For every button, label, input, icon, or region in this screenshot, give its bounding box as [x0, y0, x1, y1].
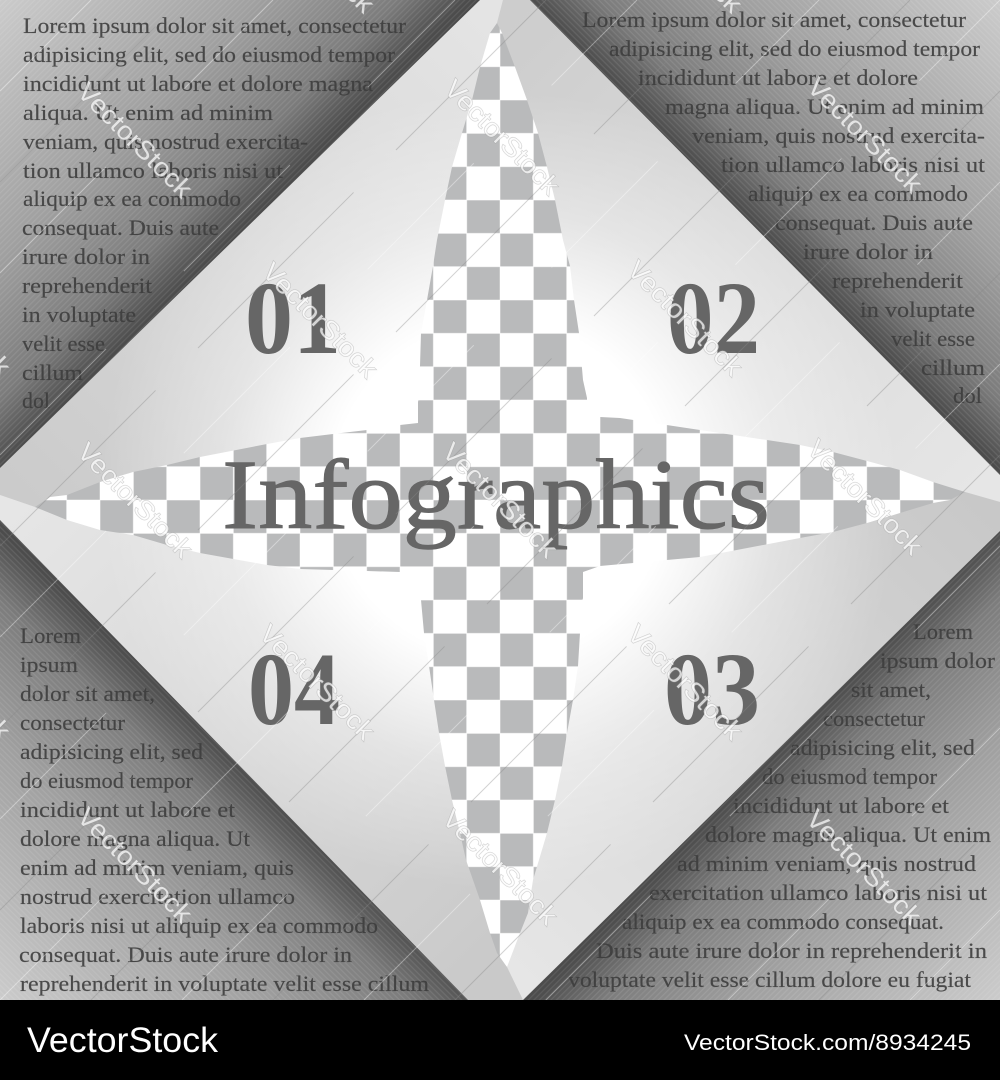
watermarks: VectorStock	[256, 256, 384, 384]
text block: bottom right: dolore magna aliqua. Ut enim	[705, 822, 991, 847]
text block: bottom right: aliquip ex ea commodo consequat.	[622, 909, 944, 934]
watermarks: VectorStock	[71, 436, 199, 564]
text block: top right: consequat. Duis aute	[775, 210, 973, 235]
text block: top left: aliquip ex ea commodo	[23, 186, 241, 211]
watermarks: VectorStock	[621, 254, 749, 382]
text block: top right: magna aliqua. Ut enim ad minim	[665, 94, 984, 119]
text block: bottom right: adipisicing elit, sed	[790, 735, 975, 760]
text block: bottom left: consectetur	[20, 710, 126, 735]
text block: top left: incididunt ut labore et dolore magna	[23, 71, 373, 96]
text block: top right	[582, 7, 985, 408]
text block: bottom right: ipsum dolor	[880, 648, 996, 673]
number 03: 03	[664, 632, 760, 747]
text block: bottom right: Lorem	[913, 619, 973, 644]
watermarks: VectorStock	[71, 801, 199, 929]
text block: top right: cillum	[921, 355, 985, 380]
footer logo: VectorStock	[27, 1021, 219, 1060]
text block: bottom left: adipisicing elit, sed	[20, 739, 203, 764]
text block: top right: aliquip ex ea commodo	[748, 181, 968, 206]
text block: bottom left	[19, 623, 429, 996]
text block: top right: veniam, quis nostrud exercita-	[692, 123, 985, 148]
text block: top right: in voluptate	[860, 297, 975, 322]
text block: bottom right: exercitation ullamco laboris nisi ut	[649, 880, 987, 905]
watermarks: VectorStock	[436, 436, 564, 564]
text block: bottom left: Lorem	[20, 623, 81, 648]
text block: top left: reprehenderit	[22, 273, 152, 298]
title: Infographics	[222, 439, 770, 550]
text block: top right: Lorem ipsum dolor sit amet, consectetur	[582, 7, 967, 32]
text block: bottom left: laboris nisi ut aliquip ex ea commodo	[20, 913, 378, 938]
text block: bottom left: ipsum	[20, 652, 78, 677]
number 01: 01	[245, 261, 341, 376]
text block: top right: tion ullamco laboris nisi ut	[721, 152, 985, 177]
text block: top left: tion ullamco laboris nisi ut	[23, 158, 283, 183]
watermarks: VectorStock	[436, 803, 564, 931]
text block: bottom right: consectetur	[823, 706, 926, 731]
text block: top left: veniam, quis nostrud exercita-	[23, 129, 308, 154]
text block: top left: in voluptate	[22, 302, 136, 327]
number 04: 04	[248, 632, 340, 747]
text block: top right: dol	[953, 383, 982, 408]
text block: top right: incididunt ut labore et dolore	[638, 65, 918, 90]
text block: bottom right	[568, 619, 996, 992]
panel: bottom-right dark corner	[523, 531, 1000, 1000]
text block: top left: cillum	[22, 360, 83, 385]
black footer bar	[0, 1000, 1000, 1080]
text block: top left: adipisicing elit, sed do eiusmod tempor	[23, 42, 396, 67]
text block: top left: consequat. Duis aute	[22, 215, 219, 240]
panel: bottom-left dark corner	[0, 520, 468, 1000]
watermarks: VectorStock	[71, 76, 199, 204]
watermarks: VectorStock	[438, 73, 566, 201]
text block: bottom left: dolor sit amet,	[20, 681, 155, 706]
text block: top left: velit esse	[22, 331, 105, 356]
text block: top right: velit esse	[891, 326, 975, 351]
text block: bottom right: ad minim veniam, quis nostrud	[677, 851, 976, 876]
text block: bottom right: do eiusmod tempor	[762, 764, 938, 789]
text block: top left: Lorem ipsum dolor sit amet, consectetur	[23, 13, 407, 38]
panel: top-left dark corner	[0, 0, 480, 468]
text block: top left	[22, 13, 407, 413]
watermarks: VectorStock	[621, 618, 749, 746]
text block: bottom left: consequat. Duis aute irure dolor in	[19, 942, 352, 967]
text block: top left: aliqua. Ut enim ad minim	[23, 100, 273, 125]
text block: bottom left: nostrud exercitation ullamco	[20, 884, 295, 909]
text block: bottom left: enim ad minim veniam, quis	[20, 855, 294, 880]
text block: bottom right: incididunt ut labore et	[733, 793, 949, 818]
text block: bottom right: Duis aute irure dolor in reprehenderit in	[596, 938, 987, 963]
text block: top left: irure dolor in	[22, 244, 150, 269]
watermarks: VectorStock	[253, 618, 381, 746]
footer image id: VectorStock.com/8934245	[684, 1030, 971, 1055]
text block: bottom right: voluptate velit esse cillum dolore eu fugiat	[568, 967, 971, 992]
text block: top right: reprehenderit	[832, 268, 963, 293]
watermarks: VectorStock	[801, 71, 929, 199]
text block: bottom left: reprehenderit in voluptate velit esse cillum	[20, 971, 429, 996]
text block: bottom left: dolore magna aliqua. Ut	[20, 826, 250, 851]
text block: bottom right: sit amet,	[851, 677, 931, 702]
panel: top-right dark corner	[530, 0, 1000, 475]
text block: top right: irure dolor in	[803, 239, 933, 264]
text block: bottom left: do eiusmod tempor	[20, 768, 194, 793]
text block: top left: dol	[22, 388, 50, 413]
watermarks: VectorStock	[800, 803, 928, 931]
number 02: 02	[667, 261, 760, 376]
watermarks: VectorStock	[801, 433, 929, 561]
text block: top right: adipisicing elit, sed do eiusmod tempor	[609, 36, 981, 61]
text block: bottom left: incididunt ut labore et	[20, 797, 235, 822]
